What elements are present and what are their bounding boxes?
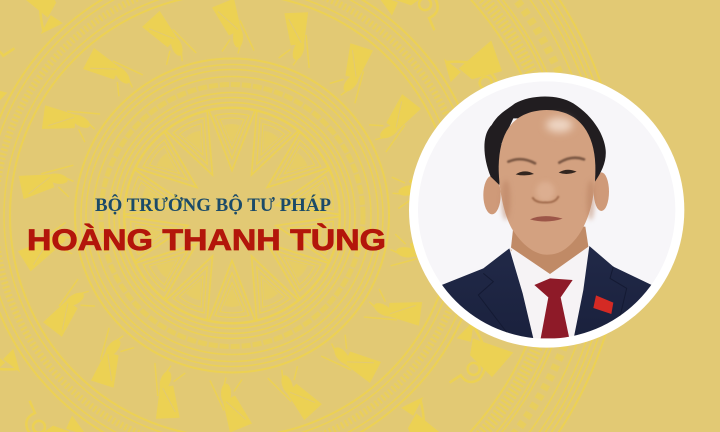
brows <box>508 159 535 163</box>
title: name: HOÀNG THANH TÙNG <box>27 223 386 257</box>
white ring <box>409 72 684 348</box>
collar and shirt <box>511 246 589 275</box>
lapel lines <box>478 267 627 337</box>
tie <box>534 278 573 338</box>
mouth <box>530 216 563 222</box>
hair <box>484 96 606 185</box>
forehead highlight <box>546 118 573 132</box>
face <box>499 110 595 255</box>
ears <box>483 176 501 214</box>
portrait <box>409 72 684 348</box>
suit left <box>442 248 533 340</box>
nose <box>532 196 559 202</box>
eyes <box>516 171 534 175</box>
suit right <box>574 246 652 337</box>
subtitle: position: BỘ TRƯỞNG BỘ TƯ PHÁP <box>95 194 331 216</box>
lapel pin <box>593 295 613 314</box>
neck <box>511 227 589 275</box>
photo <box>413 77 680 343</box>
